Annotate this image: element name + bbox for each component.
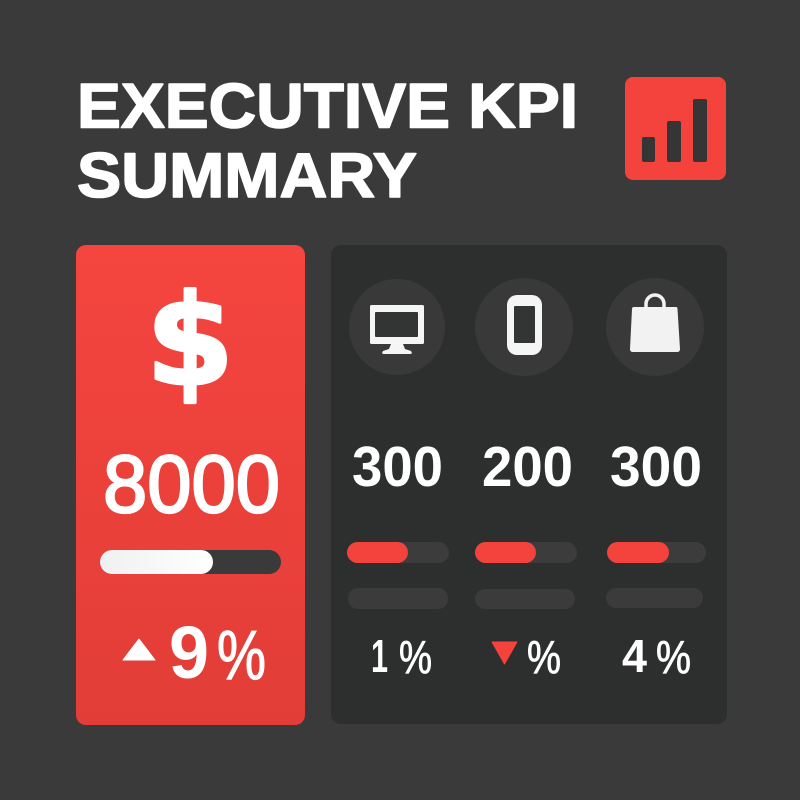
icon: bar chart badge	[625, 77, 726, 180]
channel values: 200	[482, 435, 573, 499]
channel change: retail: %	[656, 631, 691, 683]
title: SUMMARY	[77, 141, 417, 211]
panel: channels	[331, 245, 727, 724]
title	[77, 72, 578, 211]
channel change: desktop	[371, 630, 432, 683]
channel change: mobile	[492, 631, 561, 683]
revenue change	[169, 611, 266, 694]
icon: smartphone	[475, 278, 573, 376]
icon: dollar sign: $	[146, 267, 234, 414]
revenue value: 8000	[103, 439, 280, 530]
placeholder bars	[348, 588, 703, 609]
channel change: retail	[622, 630, 691, 683]
channel change: mobile: %	[527, 631, 561, 683]
revenue progress bar	[100, 550, 281, 574]
channel change: desktop: 1	[371, 630, 388, 682]
channel values: 300	[352, 435, 443, 499]
icon: up triangle	[123, 639, 155, 660]
channel values	[352, 435, 702, 499]
panel: revenue	[76, 245, 305, 725]
icon: shopping bag	[606, 278, 704, 376]
title: EXECUTIVE KPI	[77, 72, 578, 142]
channel change: desktop: %	[399, 631, 432, 683]
revenue change: %	[217, 616, 266, 694]
channel values: 300	[610, 435, 702, 499]
revenue change: 9	[169, 611, 209, 694]
icon: desktop monitor	[349, 279, 445, 375]
channel change: retail: 4	[622, 630, 647, 682]
channel progress bars	[347, 542, 706, 563]
